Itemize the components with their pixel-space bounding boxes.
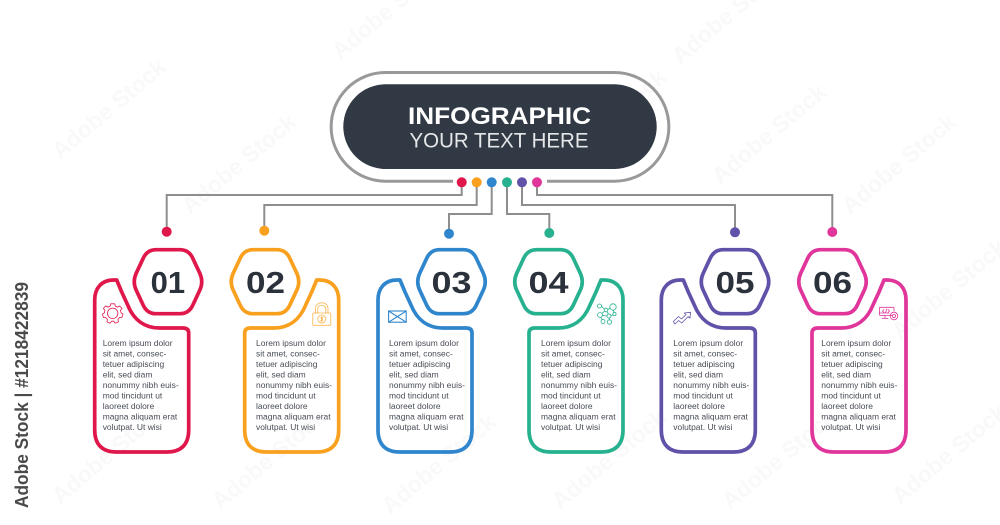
- end dot 04: [544, 228, 554, 238]
- text: Adobe Stock: [177, 108, 301, 219]
- body text 04: mod tincidunt ut: [541, 390, 601, 400]
- body text 06: sit amet, consec-: [821, 348, 885, 358]
- body text 02: elit, sed diam: [256, 370, 306, 380]
- body text 04: volutpat. Ut wisi: [541, 422, 600, 432]
- hexagon 01: [134, 250, 202, 314]
- dark pill: [343, 84, 657, 169]
- body text 05: magna aliquam erat: [673, 412, 749, 422]
- icon: gear: [102, 304, 123, 323]
- panel: step 02: [231, 226, 339, 452]
- end dot 02: [259, 226, 269, 236]
- text: Adobe Stock: [47, 53, 171, 164]
- body text 04: Lorem ipsum dolor: [541, 338, 611, 348]
- icon: rising arrow: [673, 312, 690, 324]
- hexagon 04: [515, 250, 582, 314]
- card outline 03: [378, 280, 472, 452]
- text: Adobe Stock: [207, 403, 331, 514]
- body text 01: magna aliquam erat: [103, 412, 178, 422]
- body text 05: elit, sed diam: [673, 370, 723, 380]
- title text: INFOGRAPHIC: [408, 103, 591, 130]
- body text 02: laoreet dolore: [256, 401, 308, 411]
- body text 03: tetuer adipiscing: [389, 359, 451, 369]
- body text 06: tetuer adipiscing: [821, 359, 883, 369]
- number 06: 06: [813, 266, 852, 300]
- panel: step 05: [661, 227, 769, 452]
- body text 03: mod tincidunt ut: [389, 390, 449, 400]
- number 05: 05: [716, 266, 755, 300]
- text: Adobe Stock: [547, 403, 671, 514]
- body text 06: Lorem ipsum dolor: [821, 338, 891, 348]
- body text 03: sit amet, consec-: [389, 348, 453, 358]
- body text 03: magna aliquam erat: [389, 412, 464, 422]
- body text 02: magna aliquam erat: [256, 412, 331, 422]
- body text 04: tetuer adipiscing: [541, 359, 603, 369]
- body text 02: sit amet, consec-: [256, 348, 320, 358]
- body text 02: tetuer adipiscing: [256, 359, 318, 369]
- body text 05: Lorem ipsum dolor: [673, 338, 743, 348]
- body text 03: volutpat. Ut wisi: [389, 422, 448, 432]
- card outline 05: [661, 280, 755, 452]
- end dot 05: [730, 227, 740, 237]
- body text 02: mod tincidunt ut: [256, 390, 316, 400]
- body text 05: nonummy nibh euis-: [673, 380, 749, 390]
- text: Adobe Stock: [717, 403, 841, 514]
- body text 06: volutpat. Ut wisi: [821, 422, 881, 432]
- text: Adobe Stock: [47, 398, 171, 509]
- body text 05: volutpat. Ut wisi: [673, 422, 733, 432]
- text: Adobe Stock: [837, 108, 961, 219]
- panel: step 03: [378, 229, 485, 452]
- hexagon 03: [418, 250, 485, 314]
- connector lines: [167, 182, 832, 234]
- body text 05: laoreet dolore: [673, 401, 725, 411]
- body text 05: sit amet, consec-: [673, 348, 737, 358]
- card outline 02: [245, 280, 339, 452]
- body text 03: laoreet dolore: [389, 401, 441, 411]
- subtitle text: YOUR TEXT HERE: [410, 128, 588, 152]
- body text 01: volutpat. Ut wisi: [103, 422, 162, 432]
- end dot 06: [827, 227, 837, 237]
- pill outline: [331, 72, 669, 181]
- panel: step 04: [515, 228, 623, 452]
- body text 06: laoreet dolore: [821, 401, 873, 411]
- number 01: 01: [151, 266, 185, 300]
- body text 03: Lorem ipsum dolor: [389, 338, 459, 348]
- body text 03: elit, sed diam: [389, 370, 439, 380]
- icon: envelope: [389, 311, 406, 322]
- body text 05: mod tincidunt ut: [673, 390, 734, 400]
- hexagon 02: [231, 250, 299, 314]
- body text 01: mod tincidunt ut: [103, 390, 163, 400]
- end dot 01: [162, 227, 172, 237]
- card outline 04: [529, 280, 623, 452]
- hexagon 05: [701, 250, 769, 314]
- icon: monitor with gear: [880, 307, 898, 320]
- text: Adobe Stock: [707, 78, 831, 189]
- body text 01: laoreet dolore: [103, 401, 155, 411]
- body text 06: elit, sed diam: [821, 370, 871, 380]
- number 04: 04: [528, 266, 569, 300]
- body text 01: sit amet, consec-: [103, 348, 167, 358]
- body text 04: magna aliquam erat: [541, 412, 616, 422]
- body text 06: magna aliquam erat: [821, 412, 897, 422]
- body text 04: laoreet dolore: [541, 401, 593, 411]
- body text 02: volutpat. Ut wisi: [256, 422, 315, 432]
- hexagon 06: [799, 250, 866, 314]
- body text 04: nonummy nibh euis-: [541, 380, 617, 390]
- number 02: 02: [246, 266, 285, 300]
- body text 01: elit, sed diam: [103, 370, 152, 380]
- icon: network: [598, 304, 616, 324]
- body text 01: nonummy nibh euis-: [103, 380, 179, 390]
- text: Adobe Stock: [377, 408, 501, 519]
- body text 02: Lorem ipsum dolor: [256, 338, 326, 348]
- connector dots on pill: [457, 177, 542, 187]
- card outline 01: [95, 280, 189, 452]
- body text 03: nonummy nibh euis-: [389, 380, 465, 390]
- card outline 06: [812, 280, 906, 452]
- number 03: 03: [432, 266, 472, 300]
- header: title pill: [331, 72, 669, 181]
- body text 04: elit, sed diam: [541, 370, 591, 380]
- end dot 03: [444, 229, 454, 239]
- icon: lock: [313, 303, 331, 325]
- text: Adobe Stock: [547, 63, 671, 174]
- body text 04: sit amet, consec-: [541, 348, 605, 358]
- panel: step 06: [799, 227, 906, 452]
- body text 06: nonummy nibh euis-: [821, 380, 897, 390]
- side credit text: Adobe Stock | #1218422839: [12, 282, 32, 508]
- body text 06: mod tincidunt ut: [821, 390, 882, 400]
- body text 01: tetuer adipiscing: [103, 359, 164, 369]
- panel: step 01: [95, 227, 202, 452]
- body text 01: Lorem ipsum dolor: [103, 338, 173, 348]
- body text 02: nonummy nibh euis-: [256, 380, 332, 390]
- body text 05: tetuer adipiscing: [673, 359, 735, 369]
